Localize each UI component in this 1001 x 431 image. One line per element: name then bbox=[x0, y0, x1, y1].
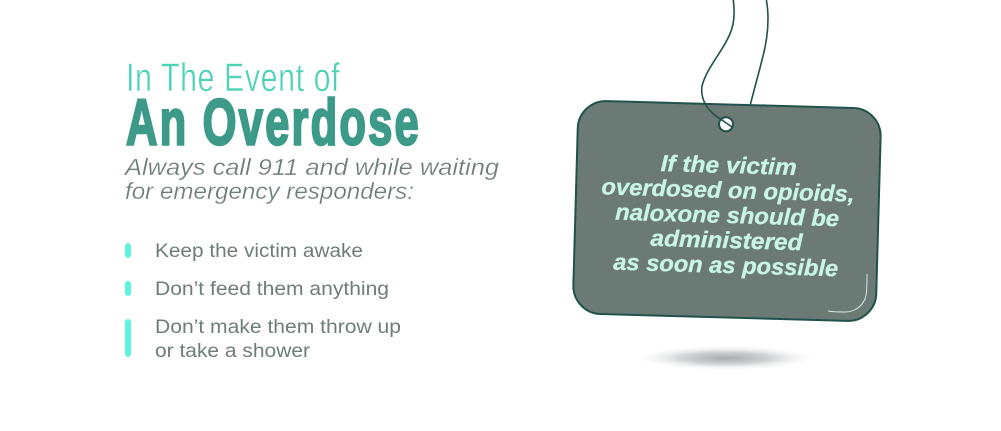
list item: no vomiting or shower: Don’t make them throw up bbox=[155, 317, 401, 338]
subtitle: Always call 911 and while waiting bbox=[123, 154, 499, 180]
tag message: overdosed on opioids, bbox=[601, 173, 855, 207]
tag message: If the victim bbox=[660, 150, 797, 180]
title: An Overdose: An Overdose bbox=[126, 86, 419, 159]
tag message: administered bbox=[650, 225, 804, 255]
string: back strand bbox=[750, 0, 768, 106]
subtitle bbox=[123, 154, 499, 204]
list item: no vomiting or shower: or take a shower bbox=[155, 341, 311, 362]
list item: keep awake: Keep the victim awake bbox=[155, 241, 363, 262]
list item: no vomiting or shower bbox=[125, 317, 401, 362]
tag highlight bbox=[828, 274, 867, 312]
tag hole bbox=[719, 117, 733, 131]
subtitle: for emergency responders: bbox=[125, 178, 414, 204]
tag message: as soon as possible bbox=[613, 249, 839, 281]
tag message bbox=[599, 148, 856, 282]
hanging tag bbox=[573, 100, 881, 322]
string: front strand bbox=[702, 0, 734, 127]
tag message: naloxone should be bbox=[615, 199, 840, 231]
title: In The Event of: In The Event of bbox=[126, 55, 340, 100]
tag shadow bbox=[630, 345, 822, 371]
list item: no feeding: Don’t feed them anything bbox=[155, 279, 389, 300]
